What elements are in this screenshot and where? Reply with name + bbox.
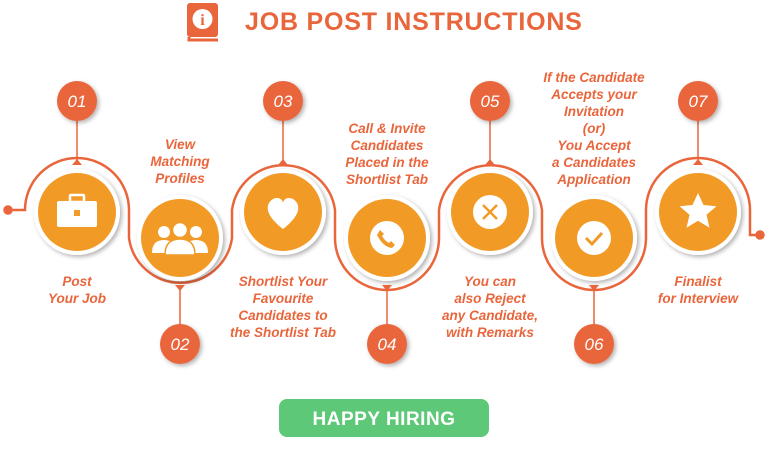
step texts: with Remarks — [446, 325, 534, 340]
icon: people — [152, 222, 208, 255]
step texts: Candidates to — [238, 308, 328, 323]
step texts: (or) — [583, 121, 606, 136]
step texts: any Candidate, — [442, 308, 538, 323]
step texts: View — [165, 137, 197, 152]
happy hiring button — [279, 399, 489, 437]
title icon: info book: i — [200, 12, 205, 29]
step texts: Accepts your — [550, 87, 638, 102]
step texts: Invitation — [564, 104, 624, 119]
icon: briefcase — [57, 195, 97, 227]
icon: phone — [370, 221, 404, 255]
step texts: Your Job — [48, 291, 106, 306]
step texts — [48, 70, 740, 340]
step circles — [34, 169, 741, 281]
step texts: Favourite — [253, 291, 314, 306]
step texts: If the Candidate — [543, 70, 645, 85]
number badges: 06 — [585, 335, 604, 354]
step texts: also Reject — [454, 291, 526, 306]
icon: star — [680, 193, 716, 228]
step texts: the Shortlist Tab — [230, 325, 336, 340]
number badges: 03 — [274, 92, 293, 111]
step texts: Candidates — [351, 138, 424, 153]
number badges — [57, 81, 718, 364]
step texts: You can — [464, 274, 516, 289]
icon: check — [577, 221, 611, 255]
step texts: for Interview — [658, 291, 740, 306]
step texts: Call & Invite — [348, 121, 426, 136]
step texts: Matching — [150, 154, 210, 169]
step texts: Shortlist Your — [239, 274, 328, 289]
step texts: You Accept — [557, 138, 631, 153]
step texts: Shortlist Tab — [346, 172, 428, 187]
number badges: 05 — [481, 92, 500, 111]
step texts: a Candidates — [552, 155, 637, 170]
happy hiring button: HAPPY HIRING — [313, 409, 455, 430]
title icon: info book — [187, 3, 218, 40]
serpentine path — [4, 158, 764, 290]
step texts: Placed in the — [345, 155, 429, 170]
step texts: Post — [62, 274, 92, 289]
step texts: Profiles — [155, 171, 205, 186]
title: JOB POST INSTRUCTIONS — [245, 8, 583, 36]
step texts: Application — [556, 172, 631, 187]
icon: reject — [473, 195, 507, 229]
number badges: 01 — [68, 92, 86, 111]
icon: heart — [268, 198, 298, 229]
number badges: 07 — [689, 92, 708, 111]
step texts: Finalist — [674, 274, 722, 289]
number badges: 04 — [378, 335, 396, 354]
number badges: 02 — [171, 335, 190, 354]
